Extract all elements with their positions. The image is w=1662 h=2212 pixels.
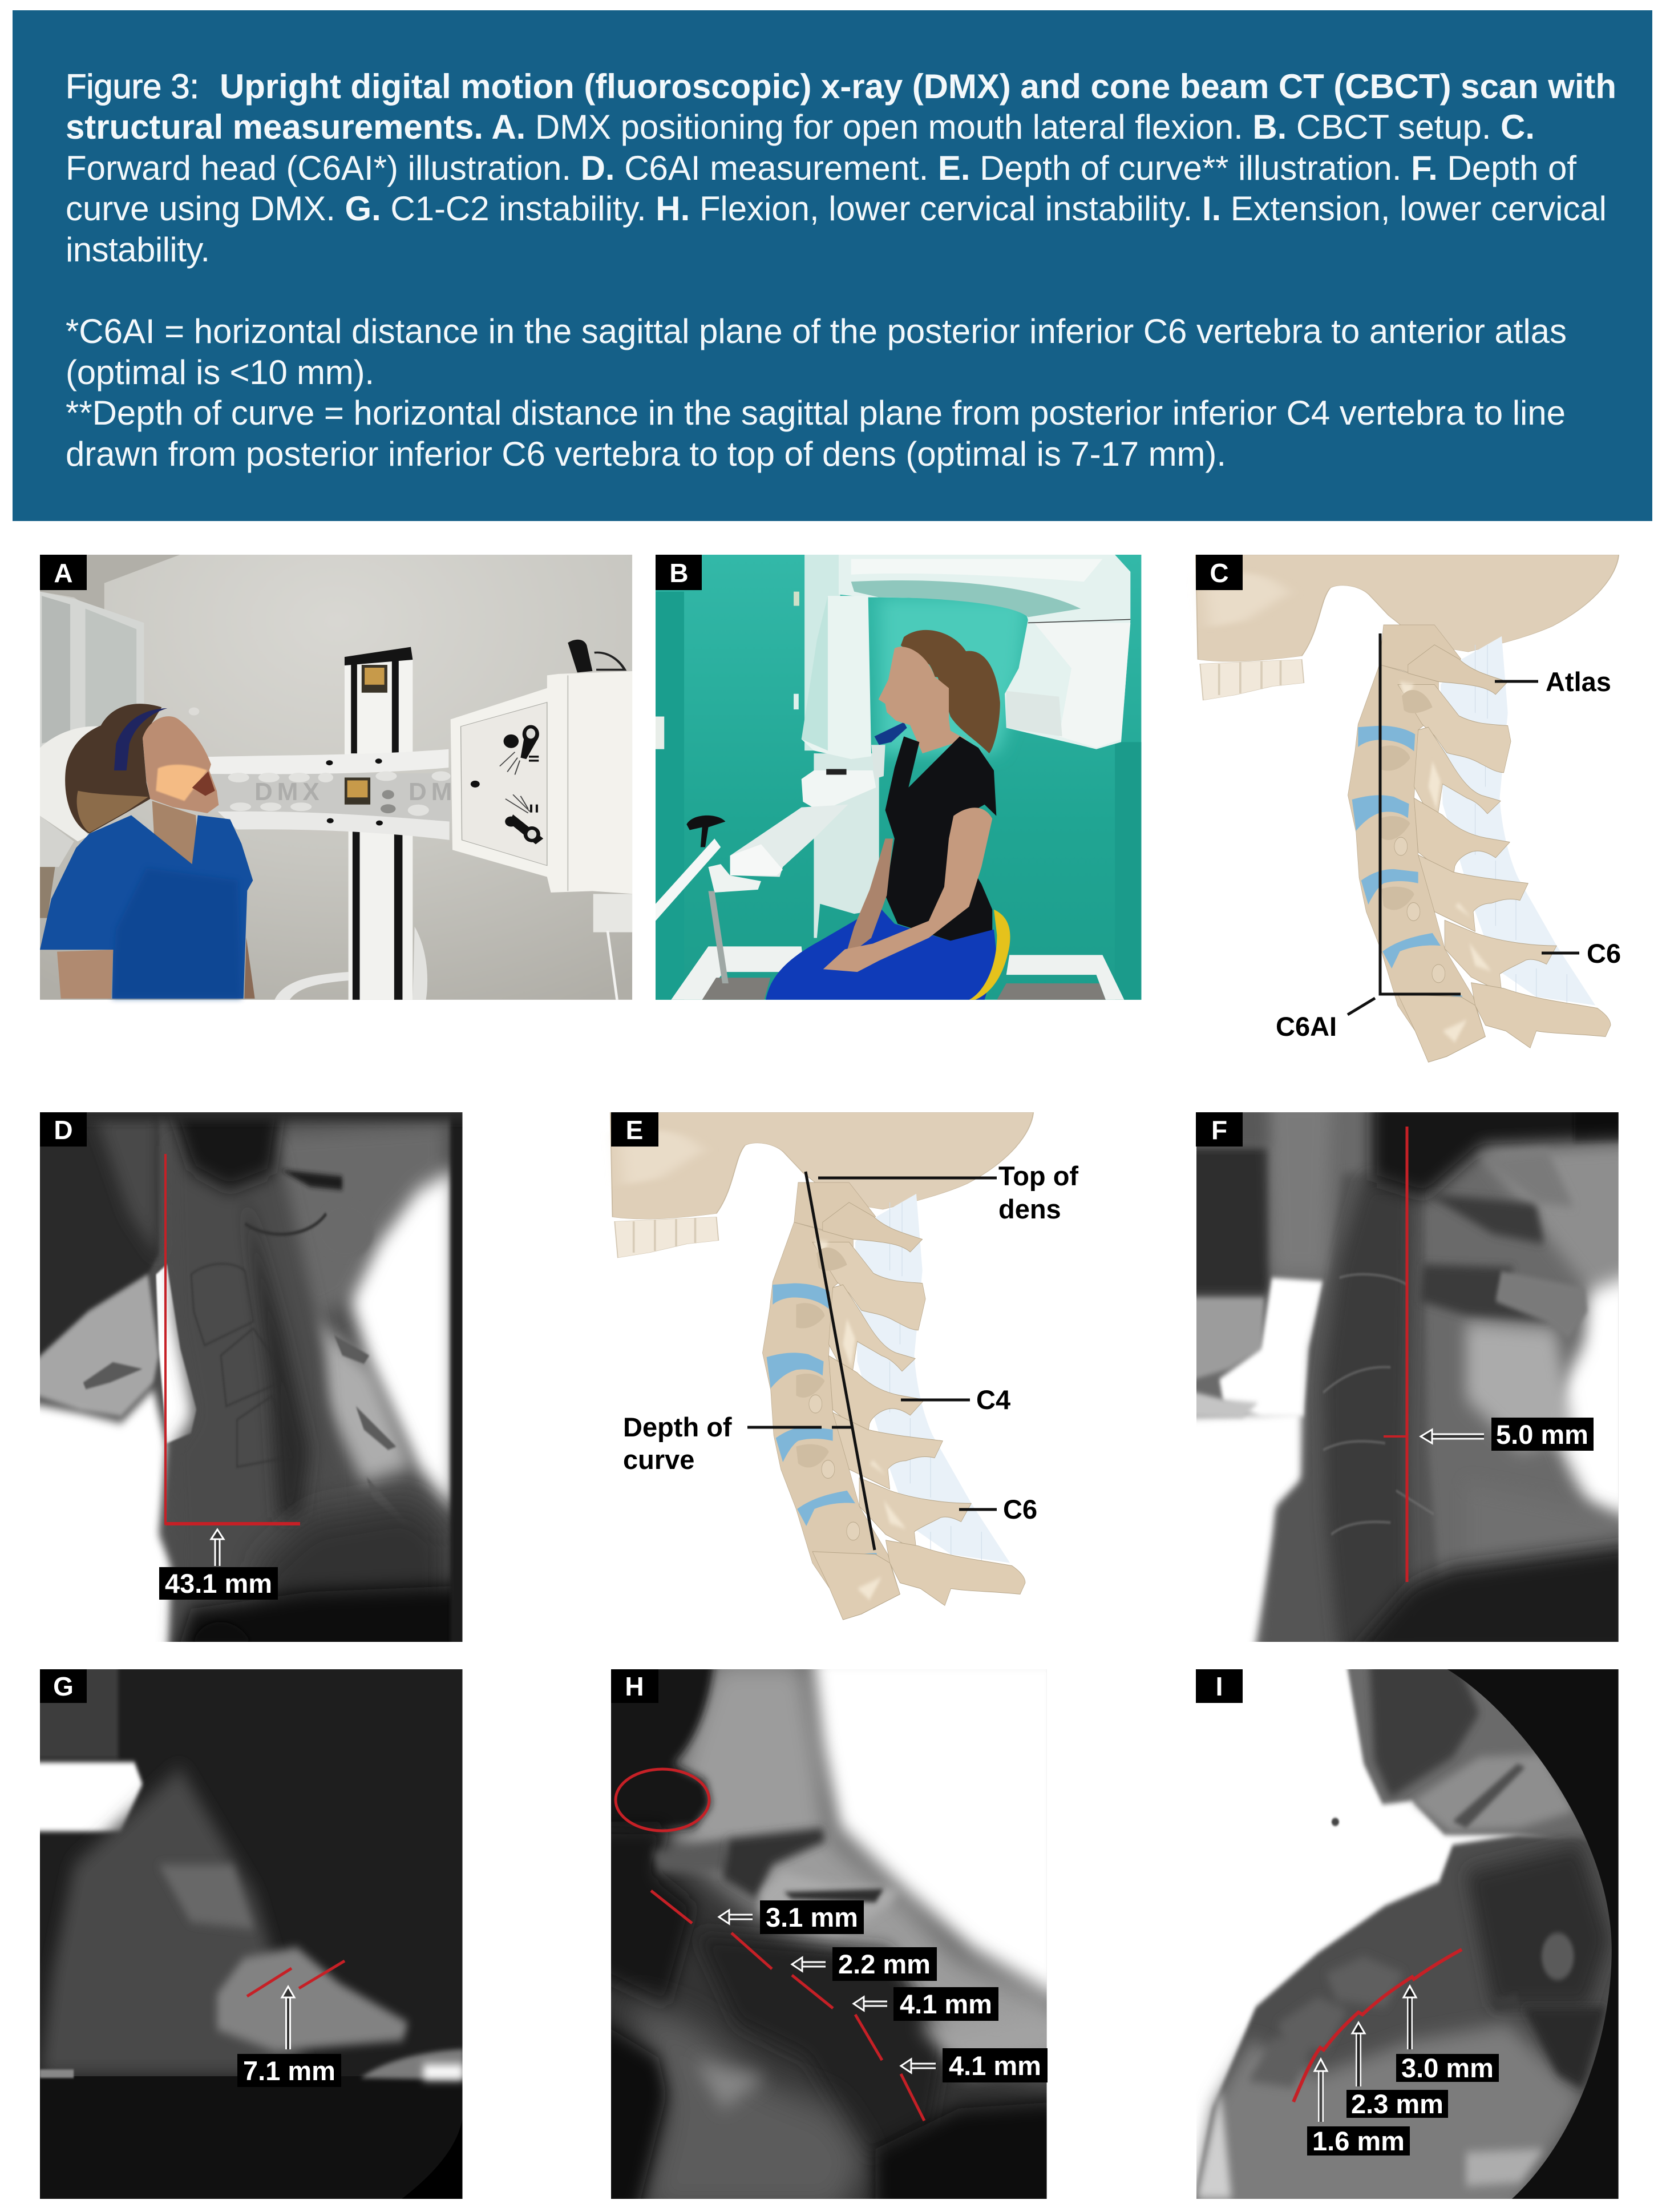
- tag: B: B: [669, 558, 689, 588]
- measurement tag: 3.1 mm: 3.1 mm: [766, 1902, 858, 1932]
- measurement tag: 2.2 mm: 2.2 mm: [838, 1949, 931, 1979]
- label: C4: C4: [976, 1384, 1010, 1415]
- measurement tag: 4.1 mm upper: 4.1 mm: [900, 1989, 992, 2019]
- tag: F: F: [1211, 1115, 1227, 1145]
- measurement tag: 2.3 mm: 2.3 mm: [1351, 2089, 1443, 2119]
- photo subject with open mouth: [40, 704, 255, 999]
- panel E: depth of curve illustration: [610, 1112, 1078, 1620]
- depth of curve line: [806, 1172, 875, 1550]
- measurement tag: 1.6 mm: 1.6 mm: [1312, 2126, 1405, 2156]
- red alignment segments: [651, 1891, 924, 2121]
- caption paragraph: figure title and panel key: [66, 67, 1616, 269]
- tag: E: [611, 1112, 658, 1147]
- label: C6: C6: [1003, 1494, 1037, 1524]
- panel G: C1-C2 instability x-ray: [26, 1652, 463, 2199]
- caption panel: [13, 10, 1652, 521]
- caption paragraph: figure title and panel key: structural measurements. A. DMX positioning for open mouth lateral flexion. B. CBCT setup. C.: [66, 108, 1535, 146]
- tag: E: E: [626, 1115, 643, 1145]
- label: Depth of curve: Depth of: [623, 1412, 732, 1442]
- panel A: DMX positioning photo: [40, 555, 633, 1000]
- red alignment curve: [1293, 1949, 1462, 2102]
- measurement tag: 5.0 mm: 5.0 mm: [1496, 1419, 1588, 1450]
- panel B: CBCT setup photo: [656, 555, 1142, 1000]
- tag: D: D: [54, 1115, 73, 1145]
- arm lettering on machine: DM: [409, 778, 456, 806]
- caption footnotes: C6AI and depth of curve definitions: (optimal is <10 mm).: [66, 353, 374, 391]
- caption footnotes: C6AI and depth of curve definitions: *C6AI = horizontal distance in the sagittal plane of the posterior inferior C6 vertebra to anterior atlas: [66, 312, 1567, 350]
- caption footnotes: C6AI and depth of curve definitions: [66, 312, 1567, 473]
- label: Top of dens: Top of: [998, 1161, 1078, 1191]
- caption paragraph: figure title and panel key: Upright digital motion (fluoroscopic) x-ray (DMX) and cone beam CT (CBCT) scan with: [220, 67, 1616, 106]
- caption paragraph: figure title and panel key: Figure 3:: [66, 67, 199, 106]
- arrow: 4.1 mm upper: [854, 1997, 887, 2011]
- measurement tag: 3.0 mm: 3.0 mm: [1401, 2053, 1494, 2083]
- label: C6AI: C6AI: [1276, 1011, 1337, 1042]
- tag: C: [1196, 555, 1243, 590]
- panel H: flexion x-ray: [611, 1669, 1048, 2199]
- panel I: extension x-ray: [1191, 1652, 1619, 2212]
- tag: I: I: [1216, 1672, 1223, 1701]
- label: Top of dens: dens: [998, 1194, 1061, 1224]
- panel F: depth of curve x-ray: [1196, 1112, 1619, 1642]
- caption footnotes: C6AI and depth of curve definitions: drawn from posterior inferior C6 vertebra to top of dens (optimal is 7-17 mm).: [66, 435, 1226, 473]
- tag: H: [611, 1669, 658, 1703]
- label: C6: [959, 1494, 1037, 1524]
- label: Atlas: Atlas: [1546, 667, 1611, 697]
- tag: B: [656, 555, 702, 590]
- tag: G: G: [53, 1672, 74, 1701]
- label: C6AI: [1276, 998, 1375, 1042]
- label: Depth of curve: curve: [623, 1444, 694, 1475]
- caption footnotes: C6AI and depth of curve definitions: **Depth of curve = horizontal distance in the sagittal plane from posterior inferior C4 vertebra to line: [66, 394, 1566, 432]
- caption paragraph: figure title and panel key: Forward head (C6AI*) illustration. D. C6AI measurement. E. Depth of curve** illustration. F. Depth of: [66, 149, 1576, 187]
- tag: G: [40, 1669, 87, 1703]
- arrow: 3.0 mm: [1404, 1986, 1416, 2049]
- tag: I: [1196, 1669, 1243, 1703]
- arrow: 43.1 mm: [211, 1529, 224, 1566]
- red alignment lines: [247, 1961, 345, 1996]
- arrow: 1.6 mm: [1315, 2059, 1327, 2122]
- arrow: 4.1 mm lower: [901, 2059, 936, 2073]
- label: Depth of curve: [623, 1412, 854, 1475]
- tag: D: [40, 1112, 87, 1147]
- arrow: 7.1 mm: [282, 1987, 294, 2049]
- measurement tag: 4.1 mm lower: 4.1 mm: [949, 2050, 1041, 2081]
- panel C: forward head illustration: [1196, 555, 1621, 1062]
- arm lettering on machine: DMX: [254, 778, 324, 806]
- label: Top of dens: [818, 1161, 1078, 1224]
- C6AI measurement lines: [1380, 633, 1461, 994]
- caption paragraph: figure title and panel key: curve using DMX. G. C1-C2 instability. H. Flexion, lower cervical instability. I. Extension, lower cervical: [66, 189, 1607, 228]
- tag: C: C: [1210, 558, 1229, 588]
- tag: A: A: [54, 558, 73, 588]
- arrow: 2.3 mm: [1352, 2023, 1365, 2086]
- caption paragraph: figure title and panel key: instability.: [66, 231, 210, 269]
- tag: F: [1196, 1112, 1243, 1147]
- tag: H: H: [625, 1672, 644, 1701]
- measurement tag: 7.1 mm: 7.1 mm: [243, 2056, 335, 2086]
- arrow: 5.0 mm: [1421, 1430, 1484, 1443]
- label: C6: [1542, 938, 1621, 968]
- tag: A: [40, 555, 87, 590]
- red circle: [616, 1769, 709, 1831]
- measurement tag: 43.1 mm: 43.1 mm: [165, 1568, 272, 1599]
- arrow: 2.2 mm: [792, 1957, 826, 1971]
- red measurement line: [165, 1154, 300, 1524]
- panel D: C6AI measurement x-ray: [40, 1112, 462, 1642]
- arm lettering on machine: [254, 778, 456, 806]
- arrow: 3.1 mm: [719, 1910, 753, 1924]
- label: C6: C6: [1587, 938, 1621, 968]
- red depth line: [1406, 1127, 1408, 1582]
